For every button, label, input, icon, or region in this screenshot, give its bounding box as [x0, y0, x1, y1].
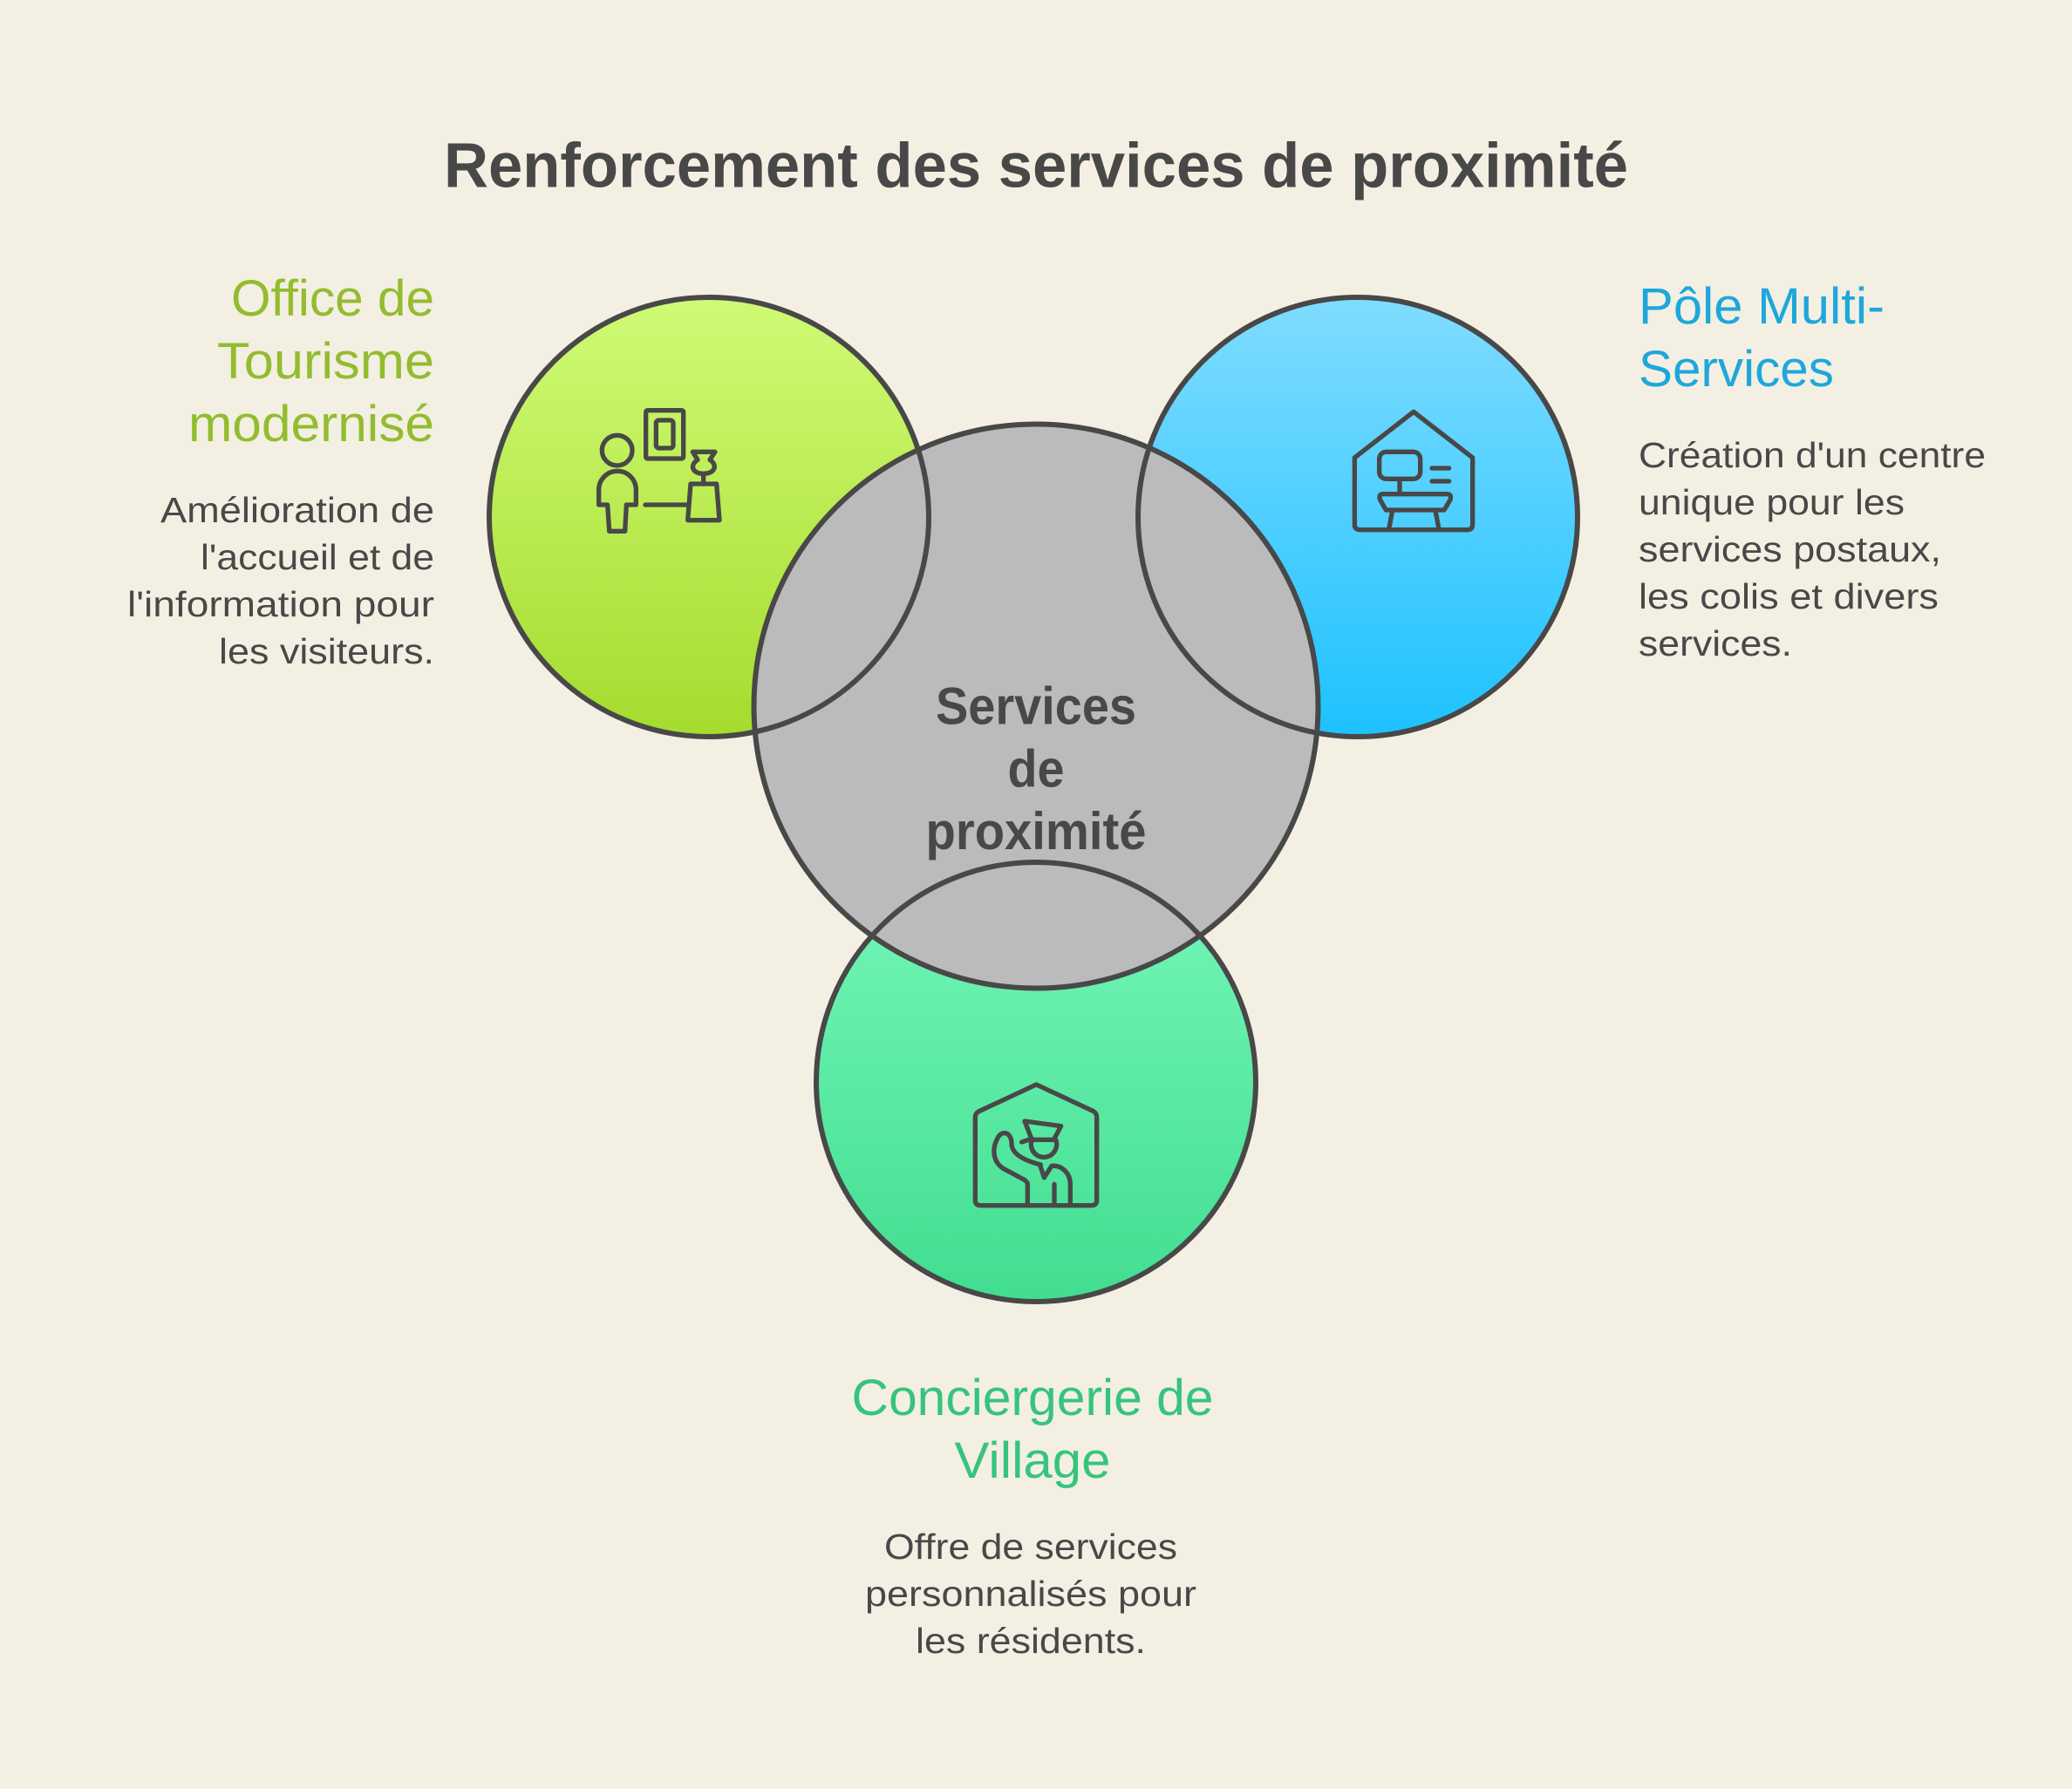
- heading: village concierge: Village: [954, 1432, 1111, 1489]
- circle: central services: [753, 424, 1319, 989]
- description: multi-service hub: services.: [1639, 623, 1792, 663]
- description: tourism office: l'accueil et de: [201, 537, 434, 577]
- description: village concierge: [865, 1527, 1196, 1661]
- description: village concierge: Offre de services: [884, 1527, 1177, 1567]
- circle: multi-service hub: [1138, 297, 1578, 737]
- icon: house with service desk: [1354, 412, 1473, 530]
- center label: Services: [936, 677, 1136, 736]
- center label: proximité: [926, 802, 1146, 860]
- center label: [926, 677, 1146, 860]
- description: multi-service hub: Création d'un centre: [1639, 435, 1986, 475]
- description: multi-service hub: unique pour les: [1639, 482, 1905, 522]
- heading: multi-service hub: Services: [1639, 341, 1834, 398]
- outline: central services: [753, 424, 1319, 989]
- description: village concierge: les résidents.: [916, 1621, 1146, 1661]
- heading: tourism office: Office de: [231, 270, 434, 327]
- heading: multi-service hub: [1639, 278, 1885, 398]
- description: multi-service hub: services postaux,: [1639, 529, 1941, 569]
- description: tourism office: l'information pour: [127, 584, 434, 624]
- outline: multi-service hub: [1138, 297, 1578, 737]
- description: village concierge: personnalisés pour: [865, 1574, 1196, 1614]
- heading: village concierge: Conciergerie de: [851, 1370, 1214, 1426]
- heading: tourism office: Tourisme: [217, 333, 434, 390]
- circle: tourism office: [489, 297, 929, 737]
- heading: tourism office: modernisé: [188, 396, 434, 452]
- icon: house with concierge: [975, 1085, 1097, 1206]
- outline: village concierge: [816, 862, 1256, 1302]
- description: tourism office: Amélioration de: [160, 490, 434, 530]
- icon: visitor at tourist desk: [599, 411, 719, 531]
- description: tourism office: les visiteurs.: [219, 631, 434, 671]
- heading: multi-service hub: Pôle Multi-: [1639, 278, 1885, 335]
- heading: village concierge: [851, 1370, 1214, 1489]
- title: Renforcement des services de proximité: [444, 131, 1628, 201]
- description: multi-service hub: [1639, 435, 1986, 663]
- center label: de: [1008, 739, 1064, 799]
- description: multi-service hub: les colis et divers: [1639, 576, 1939, 616]
- heading: tourism office: [188, 270, 434, 452]
- outline: tourism office: [489, 297, 929, 737]
- circle: village concierge: [816, 862, 1256, 1302]
- description: tourism office: [127, 490, 434, 671]
- venn diagram: [489, 297, 1578, 1302]
